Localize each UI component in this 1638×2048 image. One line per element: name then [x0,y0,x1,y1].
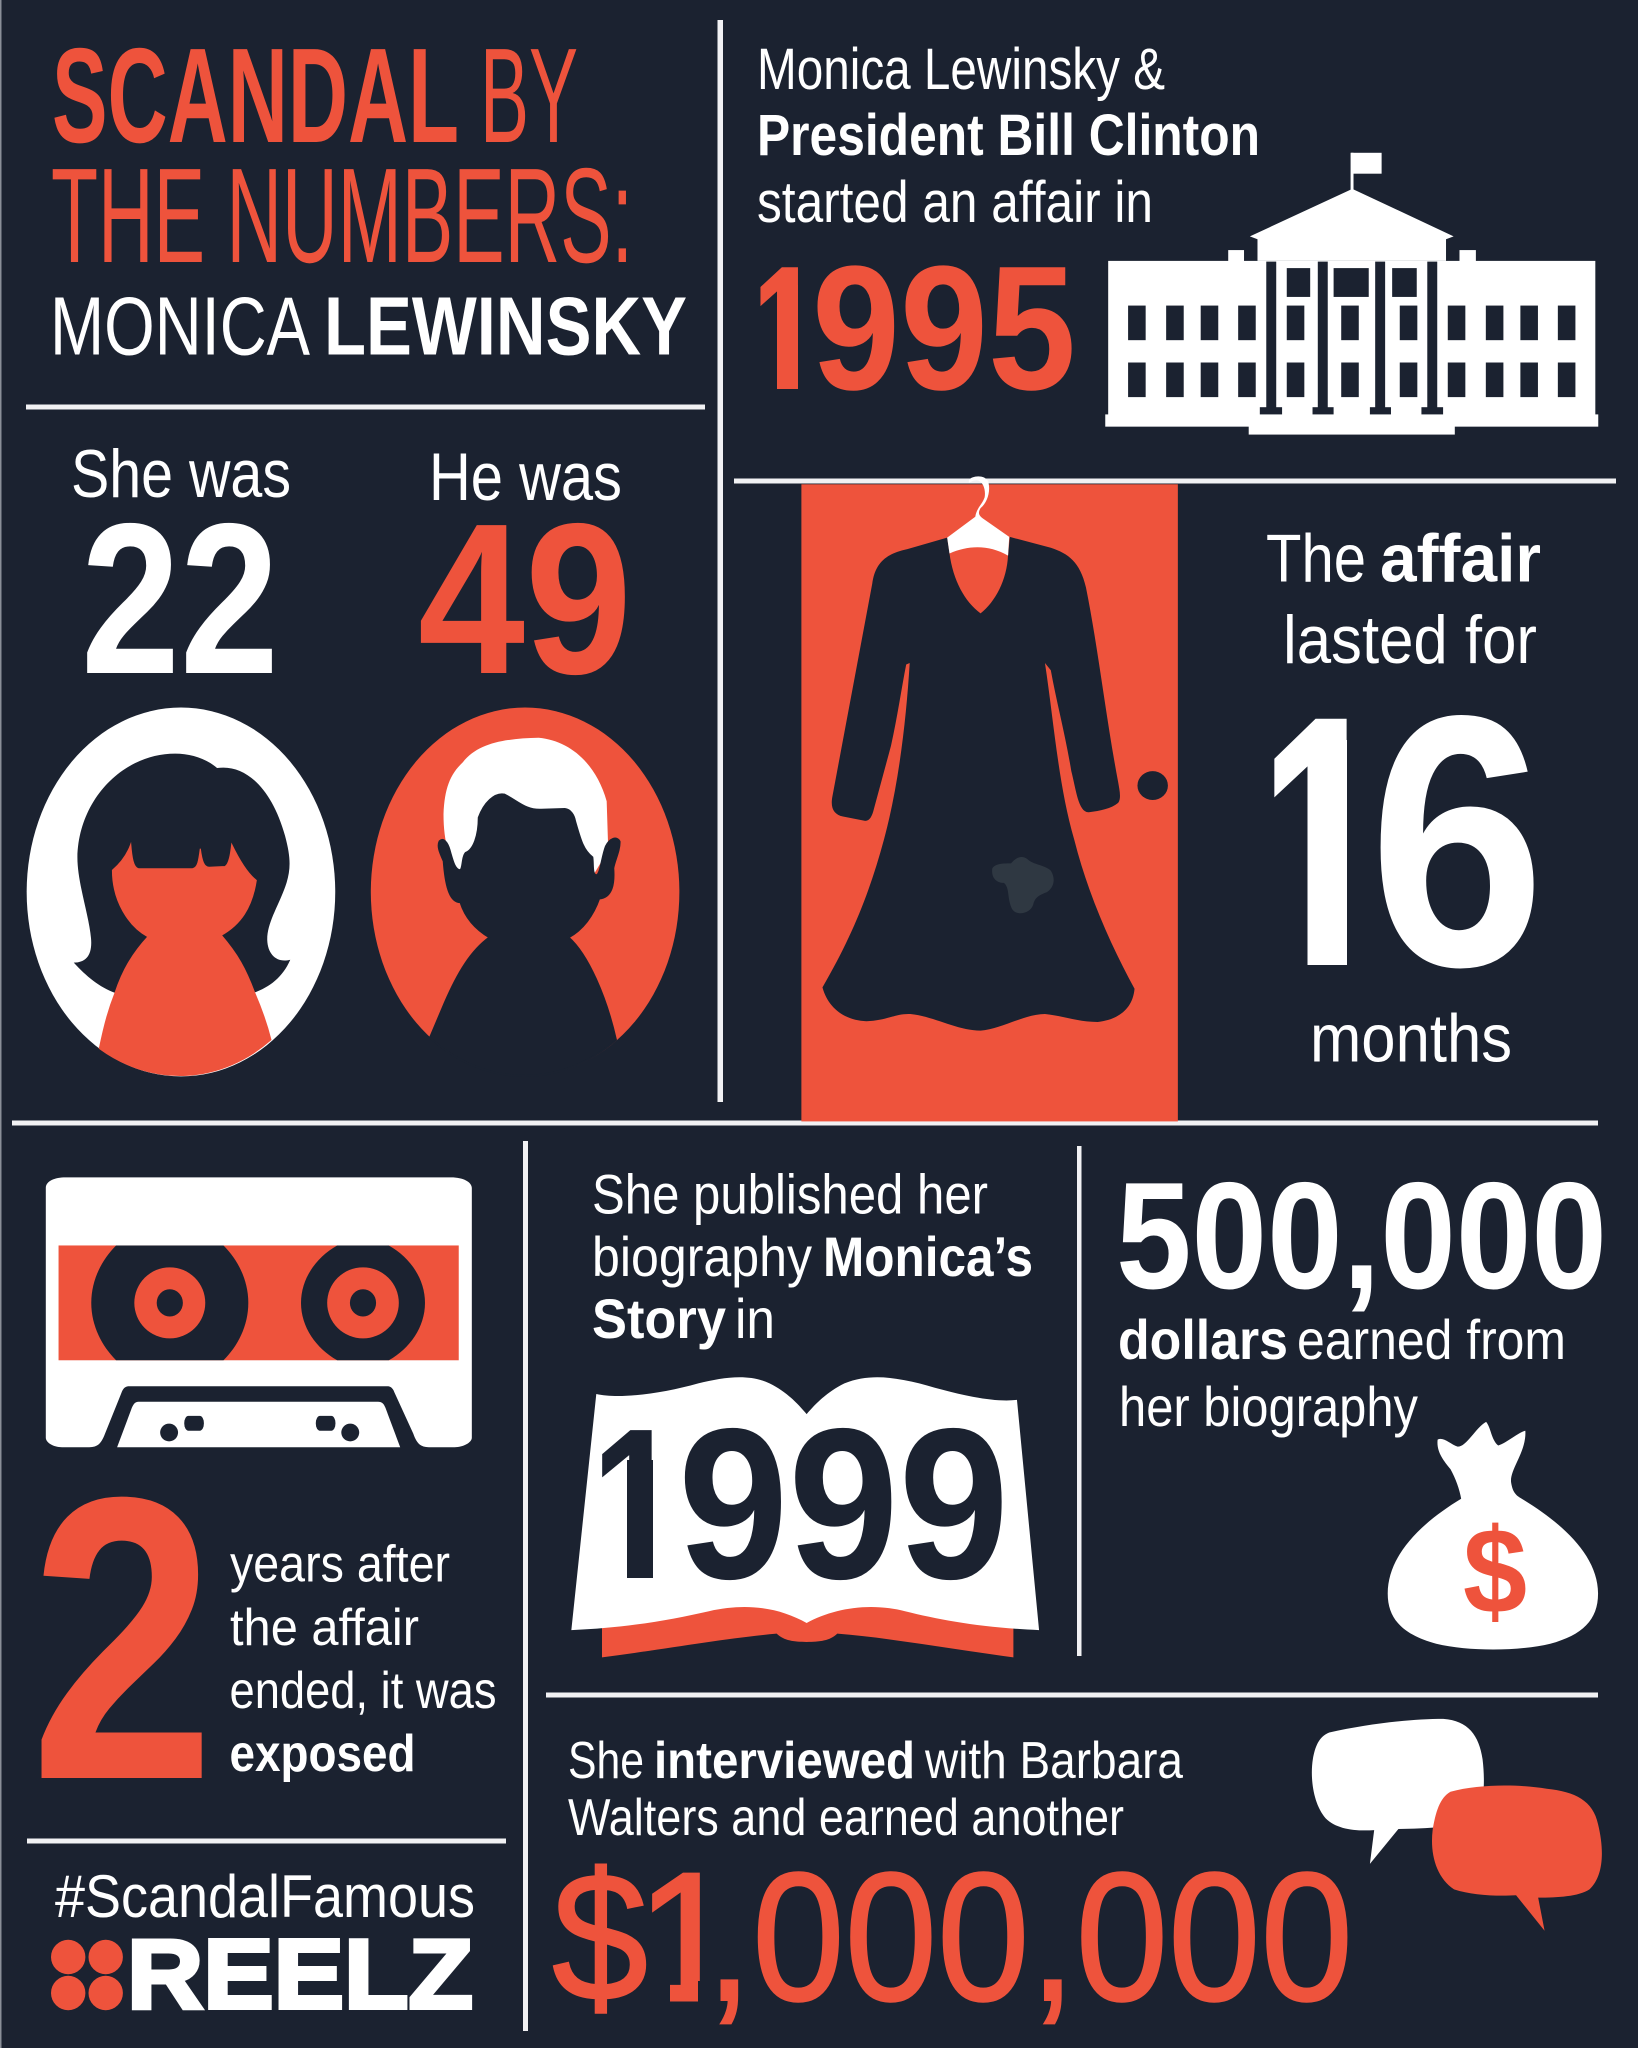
year 1995: 995 [812,229,1076,427]
icon: door knob [1137,771,1168,800]
biography text: She published her [592,1162,988,1226]
interview text: She [568,1732,644,1790]
affair intro text [757,37,1260,235]
title: LEWINSKY [324,280,687,372]
icon: hanger [947,476,1009,556]
earnings 500,000: earned from [1297,1308,1566,1371]
earnings 500,000 [1116,1151,1607,1438]
earnings 500,000: dollars [1118,1308,1288,1371]
affair duration text: months [1310,1000,1512,1076]
affair intro text: Monica Lewinsky & [757,37,1165,102]
biography text: Story [592,1287,726,1350]
earnings 500,000: her biography [1119,1375,1418,1438]
amount $1,000,000: ,000,000 [706,1834,1353,2039]
affair intro text: started an affair in [757,170,1153,235]
icon: money bag: $ [1463,1503,1527,1639]
icon: open book [571,1377,1039,1657]
exposed text: ended, it was [230,1662,496,1720]
she was 22: 22 [81,478,279,719]
affair intro text: President Bill Clinton [757,103,1260,168]
white bubble [1312,1719,1484,1864]
icon: woman portrait [27,708,335,1076]
year 1999: 1 [591,1383,682,1624]
title: BY [480,20,578,171]
affair duration text [1258,520,1545,1076]
exposed text: exposed [230,1725,416,1783]
exposed text: years after [230,1536,450,1594]
icon: dress [822,537,1135,1031]
big number 2: 2 [30,1414,215,1864]
exposed text [230,1536,496,1783]
she was 22: She was [71,436,291,512]
logo: reelz: REELZ [127,1919,473,2029]
affair duration text: 6 [1369,641,1545,1041]
interview text: with Barbara [924,1732,1183,1790]
affair duration text: lasted for [1283,602,1537,678]
amount $1,000,000: 1 [636,1834,738,2039]
icon: stain [992,857,1054,913]
title: THE NUMBERS: [51,140,633,291]
biography text: in [735,1287,775,1350]
title: MONICA [50,280,311,372]
door [801,484,1178,1121]
year 1999: 999 [678,1383,1009,1624]
biography text: Monica’s [823,1225,1033,1288]
panel: door with blue dress [801,476,1178,1121]
icon: cassette tape [46,1177,472,1447]
icon: money bag [1388,1422,1598,1650]
amount $1,000,000: $ [552,1834,648,2039]
hashtag: #ScandalFamous [55,1863,475,1930]
title [50,20,687,372]
icon: speech bubbles [1312,1719,1602,1931]
biography text [592,1162,1033,1350]
year 1995: 1 [752,229,821,427]
he was 49: He was [429,439,622,515]
interview text [568,1732,1183,1847]
interview text: Walters and earned another [568,1789,1124,1847]
biography text: biography [592,1225,812,1288]
interview text: interviewed [654,1732,915,1790]
he was 49: 49 [418,478,632,719]
affair duration text: 1 [1258,641,1391,1041]
title: SCANDAL [52,20,459,171]
icon: white house [1105,153,1598,435]
orange bubble [1432,1785,1602,1931]
icon: man portrait [371,708,679,1076]
affair duration text: affair [1380,520,1541,596]
affair duration text: The [1266,520,1366,596]
exposed text: the affair [230,1599,419,1657]
